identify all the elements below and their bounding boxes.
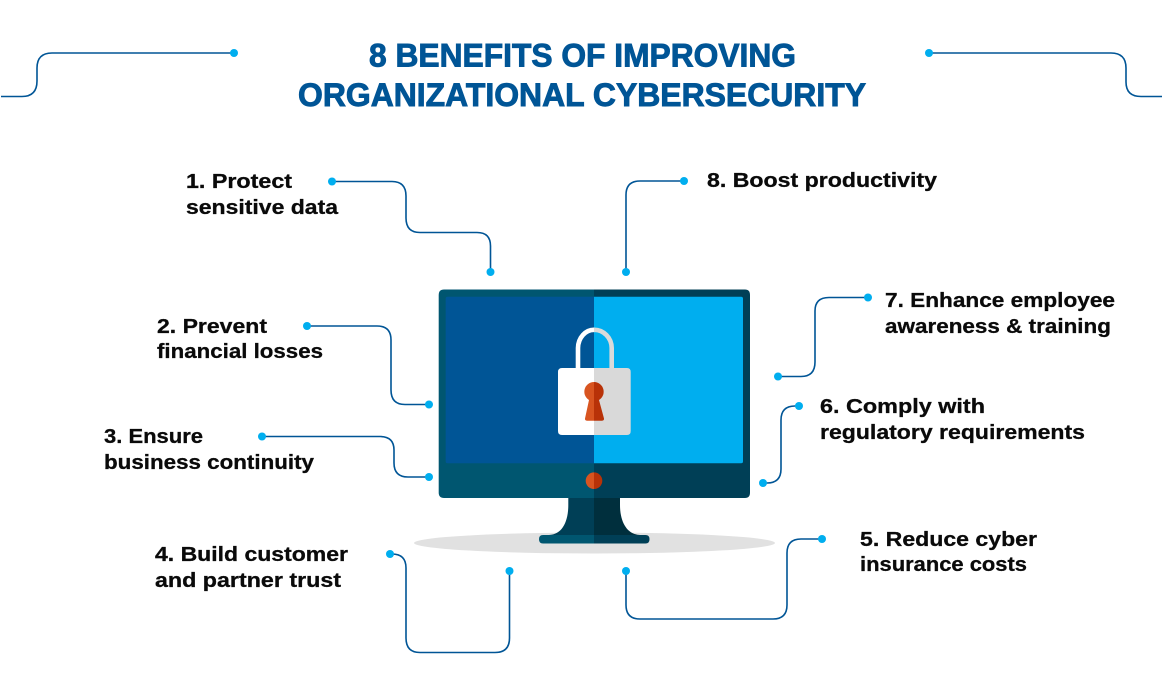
benefit 5 <box>622 528 1037 619</box>
benefit 3: business continuity <box>104 451 315 474</box>
benefit 6: 6. Comply with <box>820 395 985 418</box>
benefit 8: 8. Boost productivity <box>707 169 938 192</box>
monitor shadow <box>414 532 775 554</box>
power button <box>586 472 602 489</box>
keyhole <box>584 382 604 421</box>
benefit 7 <box>774 289 1115 380</box>
title <box>298 38 866 113</box>
benefit 8 <box>622 169 938 276</box>
benefit 3: 3. Ensure <box>104 425 203 448</box>
title: 8 BENEFITS OF IMPROVING <box>369 38 796 74</box>
benefit 6: regulatory requirements <box>820 421 1085 444</box>
benefit 1: sensitive data <box>186 196 339 219</box>
benefit 7: 7. Enhance employee <box>885 289 1115 312</box>
benefit 7: awareness & training <box>885 315 1111 338</box>
benefit 4 <box>155 543 514 652</box>
benefit 3 <box>104 425 433 481</box>
benefit 4: and partner trust <box>155 569 341 592</box>
illustration: computer monitor with padlock <box>414 290 775 554</box>
monitor screen <box>446 297 743 463</box>
benefit 2: 2. Prevent <box>157 315 267 338</box>
benefit 2 <box>157 315 433 408</box>
benefit 5: 5. Reduce cyber <box>860 528 1037 551</box>
benefit 1: 1. Protect <box>186 170 292 193</box>
padlock <box>558 330 631 435</box>
benefit 5: insurance costs <box>860 553 1027 576</box>
monitor bezel <box>439 290 750 498</box>
title: ORGANIZATIONAL CYBERSECURITY <box>298 77 866 113</box>
benefit 1 <box>186 170 494 276</box>
decorative connector: top left <box>1 49 238 96</box>
benefit 6 <box>759 395 1085 487</box>
decorative connector: top right <box>925 49 1162 96</box>
monitor stand <box>539 497 650 544</box>
benefit 2: financial losses <box>157 340 323 363</box>
benefit 4: 4. Build customer <box>155 543 348 566</box>
